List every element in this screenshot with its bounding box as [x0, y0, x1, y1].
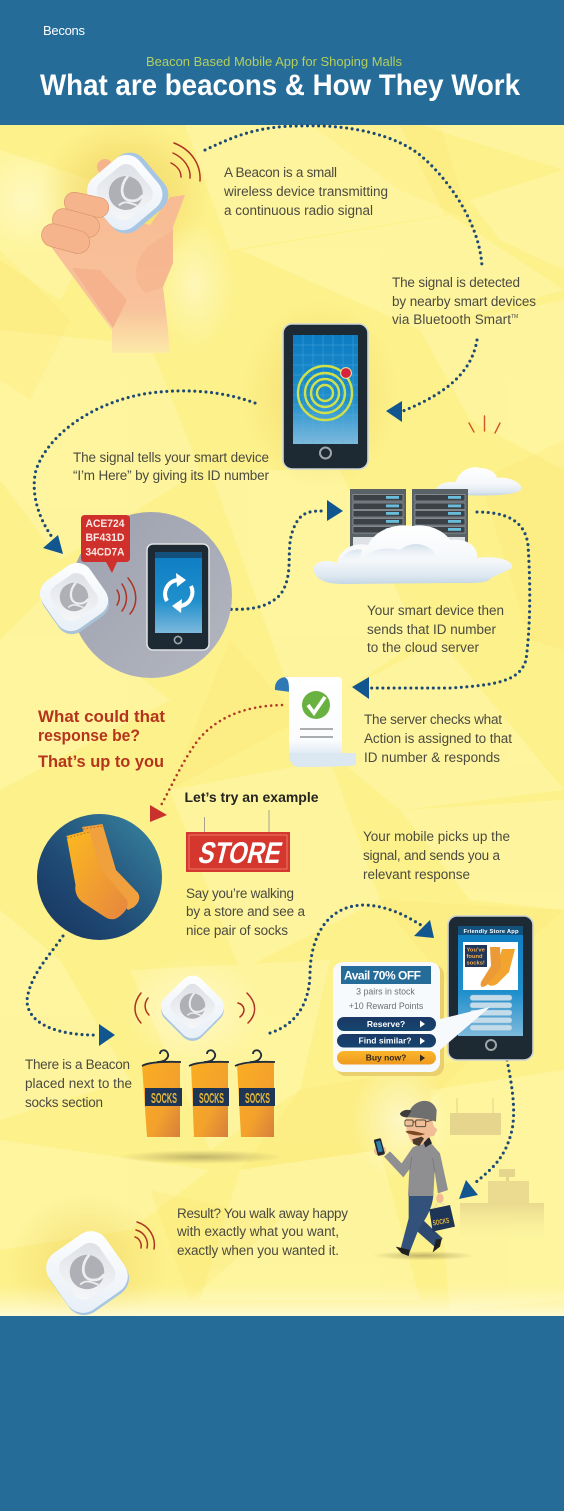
arrow: to mobile — [414, 920, 434, 938]
callout: offer card: Avail 70% OFF — [344, 968, 421, 982]
icon: check mark — [302, 691, 330, 719]
icon: signal arcs — [171, 143, 200, 181]
callout: ID number tag — [81, 515, 130, 573]
fingers — [39, 190, 111, 256]
text: signal detected: TM — [511, 314, 518, 320]
text: result: exactly when you wanted it. — [177, 1243, 339, 1258]
big cloud — [313, 525, 512, 584]
dotted path: device to server — [220, 511, 325, 609]
text: mobile picks up: Your mobile picks up the — [363, 829, 510, 844]
found socks badge — [465, 945, 487, 967]
heading: what could that response be — [38, 707, 165, 771]
text: server checks action — [364, 712, 512, 765]
button: buy now: Buy now? — [366, 1052, 406, 1062]
button: reserve: Reserve? — [367, 1019, 405, 1029]
heading: what could that response be: That’s up to you — [38, 752, 164, 771]
text: signal detected: by nearby smart devices — [392, 294, 536, 309]
panel: header band — [0, 0, 564, 125]
button: find similar — [337, 1034, 436, 1048]
text: mobile picks up: relevant response — [363, 867, 470, 882]
dotted path: phone to beacon with ID — [34, 391, 255, 537]
heading: example: Let’s try an example — [184, 789, 319, 805]
header label: Becons: Becons — [43, 23, 86, 38]
hand and phone — [374, 1138, 386, 1156]
text: beacon next to socks: socks section — [25, 1095, 103, 1110]
front leg — [401, 1195, 433, 1251]
text: sends ID to cloud: to the cloud server — [367, 640, 480, 655]
radar rings — [298, 366, 352, 420]
illustration: store app phone: Friendly Store App — [464, 929, 519, 935]
callout: offer card: 3 pairs in stock — [356, 986, 415, 996]
icon: alert ticks — [469, 416, 500, 433]
arrow: to server — [327, 500, 343, 521]
icon: beacon — [34, 557, 115, 640]
dotted path: socks to shelf — [27, 936, 94, 1035]
arrow: to customer — [459, 1180, 478, 1199]
dotted path: server to receipt — [370, 512, 530, 688]
text: result: Result? You walk away happy — [177, 1206, 348, 1221]
cap — [400, 1101, 437, 1122]
dotted path: mobile to customer — [475, 1060, 514, 1183]
head — [406, 1118, 437, 1145]
text: what a beacon is: A Beacon is a small — [224, 165, 337, 180]
callout: ID number tag: ACE724 — [86, 518, 125, 530]
illustration: phone with radar — [283, 324, 368, 469]
dotted path: shelf to mobile — [270, 905, 424, 1033]
footer band — [0, 1316, 564, 1511]
text: walking by store: nice pair of socks — [186, 923, 288, 938]
phone with sync icon — [147, 544, 209, 650]
back leg — [410, 1217, 443, 1247]
text: walking by store: Say you’re walking — [186, 886, 294, 901]
text: what a beacon is: a continuous radio signal — [224, 203, 373, 218]
text: sends ID to cloud: sends that ID number — [367, 622, 496, 637]
illustration: socks on hangers — [119, 1050, 283, 1164]
sock pack 3: SOCKS — [245, 1090, 270, 1107]
button: reserve — [337, 1017, 436, 1031]
illustration: receipt with check — [275, 677, 356, 767]
found socks badge: socks! — [466, 960, 485, 966]
illustration: man walking with shopping bag — [372, 1101, 475, 1260]
illustration: store sign: STORE — [195, 836, 286, 870]
illustration: hand holding beacon — [39, 143, 200, 353]
text: server checks action: Action is assigned to that — [364, 731, 512, 746]
callout: offer card: +10 Reward Points — [349, 1001, 424, 1011]
illustration: store sign — [186, 810, 290, 872]
illustration: socks in circle — [37, 814, 162, 940]
text: signal detected: The signal is detected — [392, 275, 520, 290]
text: sends ID to cloud: Your smart device then — [367, 603, 504, 618]
text: sends ID to cloud — [367, 603, 504, 655]
sock pack 2: SOCKS — [199, 1090, 224, 1107]
callout: offer card — [333, 962, 490, 1076]
illustration: beacon sends ID to phone — [34, 512, 232, 678]
text: what a beacon is — [223, 165, 388, 218]
icon: signal arcs left — [135, 993, 149, 1023]
text: signal detected: via Bluetooth Smart — [392, 312, 511, 327]
server rack right — [412, 489, 468, 551]
arrow: to beacon with ID — [43, 535, 63, 554]
text: beacon next to socks: There is a Beacon — [25, 1057, 130, 1072]
heading: what could that response be: What could that — [38, 707, 165, 726]
button: find similar: Find similar? — [359, 1036, 411, 1046]
shopping bag: SOCKS — [432, 1216, 450, 1227]
text: result: with exactly what you want, — [176, 1224, 339, 1239]
small cloud — [436, 467, 521, 496]
text: walking by store: by a store and see a — [186, 904, 305, 919]
text: I'm here: The signal tells your smart device — [73, 450, 269, 465]
text: walking by store — [186, 886, 305, 938]
text: result — [176, 1206, 348, 1258]
found socks badge: You've — [466, 948, 486, 954]
radar dot — [341, 368, 351, 378]
icon: signal arcs right — [238, 993, 255, 1023]
icon: beacon — [80, 145, 176, 241]
icon: signal arcs — [135, 1222, 154, 1249]
found socks badge: found — [466, 954, 483, 960]
glasses — [405, 1120, 433, 1127]
illustration: cloud servers — [313, 467, 521, 584]
sock pack 3 — [235, 1050, 275, 1137]
red dotted path: response to socks — [160, 705, 282, 807]
text: mobile picks up — [363, 829, 510, 882]
sock pack 2 — [189, 1050, 229, 1137]
jacket — [384, 1140, 448, 1196]
text: signal detected — [392, 275, 536, 327]
arrow: to shelf — [99, 1024, 115, 1046]
sock pack 1 — [142, 1050, 182, 1137]
callout: ID number tag: 34CD7A — [86, 546, 125, 558]
server rack left — [350, 489, 406, 551]
arrow: to socks — [150, 805, 167, 822]
text: server checks action: The server checks what — [364, 712, 502, 727]
text: beacon next to socks: placed next to the — [25, 1076, 132, 1091]
illustration: store app phone — [448, 916, 533, 1060]
dotted path: detection to phone — [403, 340, 477, 411]
text: beacon next to socks — [25, 1057, 132, 1110]
socks image — [481, 947, 515, 987]
title: What are beacons & How They Work — [40, 69, 520, 102]
text: server checks action: ID number & responds — [364, 750, 500, 765]
callout: ID number tag: BF431D — [86, 532, 125, 544]
illustration: ghost store and register — [450, 1098, 544, 1245]
illustration: beacon above socks — [135, 970, 255, 1046]
text: what a beacon is: wireless device transmitting — [223, 184, 388, 199]
sock pack 1: SOCKS — [151, 1090, 177, 1107]
arrow: to receipt — [352, 677, 369, 699]
heading: what could that response be: response be? — [38, 726, 140, 745]
arrow: to phone — [386, 401, 402, 422]
text: mobile picks up: signal, and sends you a — [363, 848, 500, 863]
text: I'm here: “I’m Here” by giving its ID number — [73, 468, 270, 483]
text: I'm here — [73, 450, 270, 483]
dotted path: beacon to detection — [205, 126, 482, 267]
icon: signal arcs — [117, 578, 136, 614]
shopping bag — [429, 1194, 455, 1232]
illustration: final beacon — [39, 1222, 154, 1322]
button: buy now — [337, 1051, 436, 1064]
subtitle: Beacon Based Mobile App for Shoping Malls — [146, 54, 402, 69]
